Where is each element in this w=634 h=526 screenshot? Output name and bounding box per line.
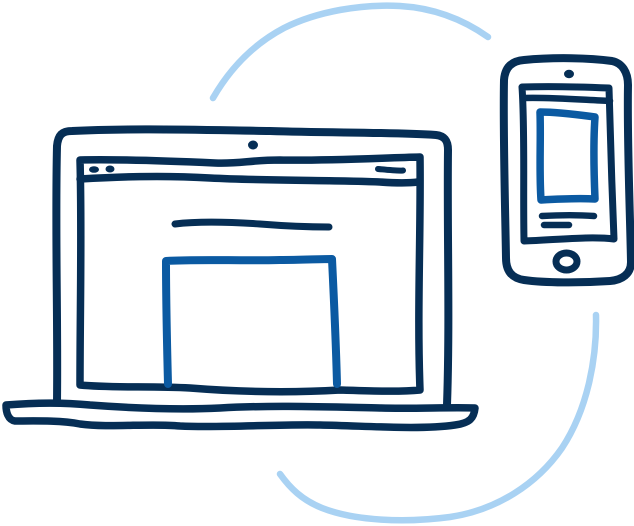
headline bar	[175, 222, 329, 227]
browser menu mark	[378, 169, 403, 171]
content image frame	[166, 259, 337, 384]
phone home button	[556, 253, 577, 270]
browser window	[80, 157, 420, 392]
browser dot one	[89, 166, 99, 173]
phone content frame	[540, 112, 595, 200]
arc: lower sync arrow	[280, 315, 596, 520]
browser dot two	[106, 166, 114, 172]
phone text line one	[542, 212, 594, 219]
icon: phone	[504, 58, 631, 282]
phone toolbar line	[523, 98, 610, 101]
phone body	[504, 58, 631, 282]
arc: upper sync arrow	[213, 6, 488, 98]
phone screen	[522, 87, 614, 241]
icon: laptop	[6, 129, 475, 427]
phone camera	[564, 70, 574, 78]
browser toolbar line	[80, 176, 418, 183]
laptop base	[6, 403, 475, 427]
phone text line two	[544, 222, 569, 228]
laptop lid	[56, 129, 448, 405]
laptop webcam	[248, 140, 258, 150]
